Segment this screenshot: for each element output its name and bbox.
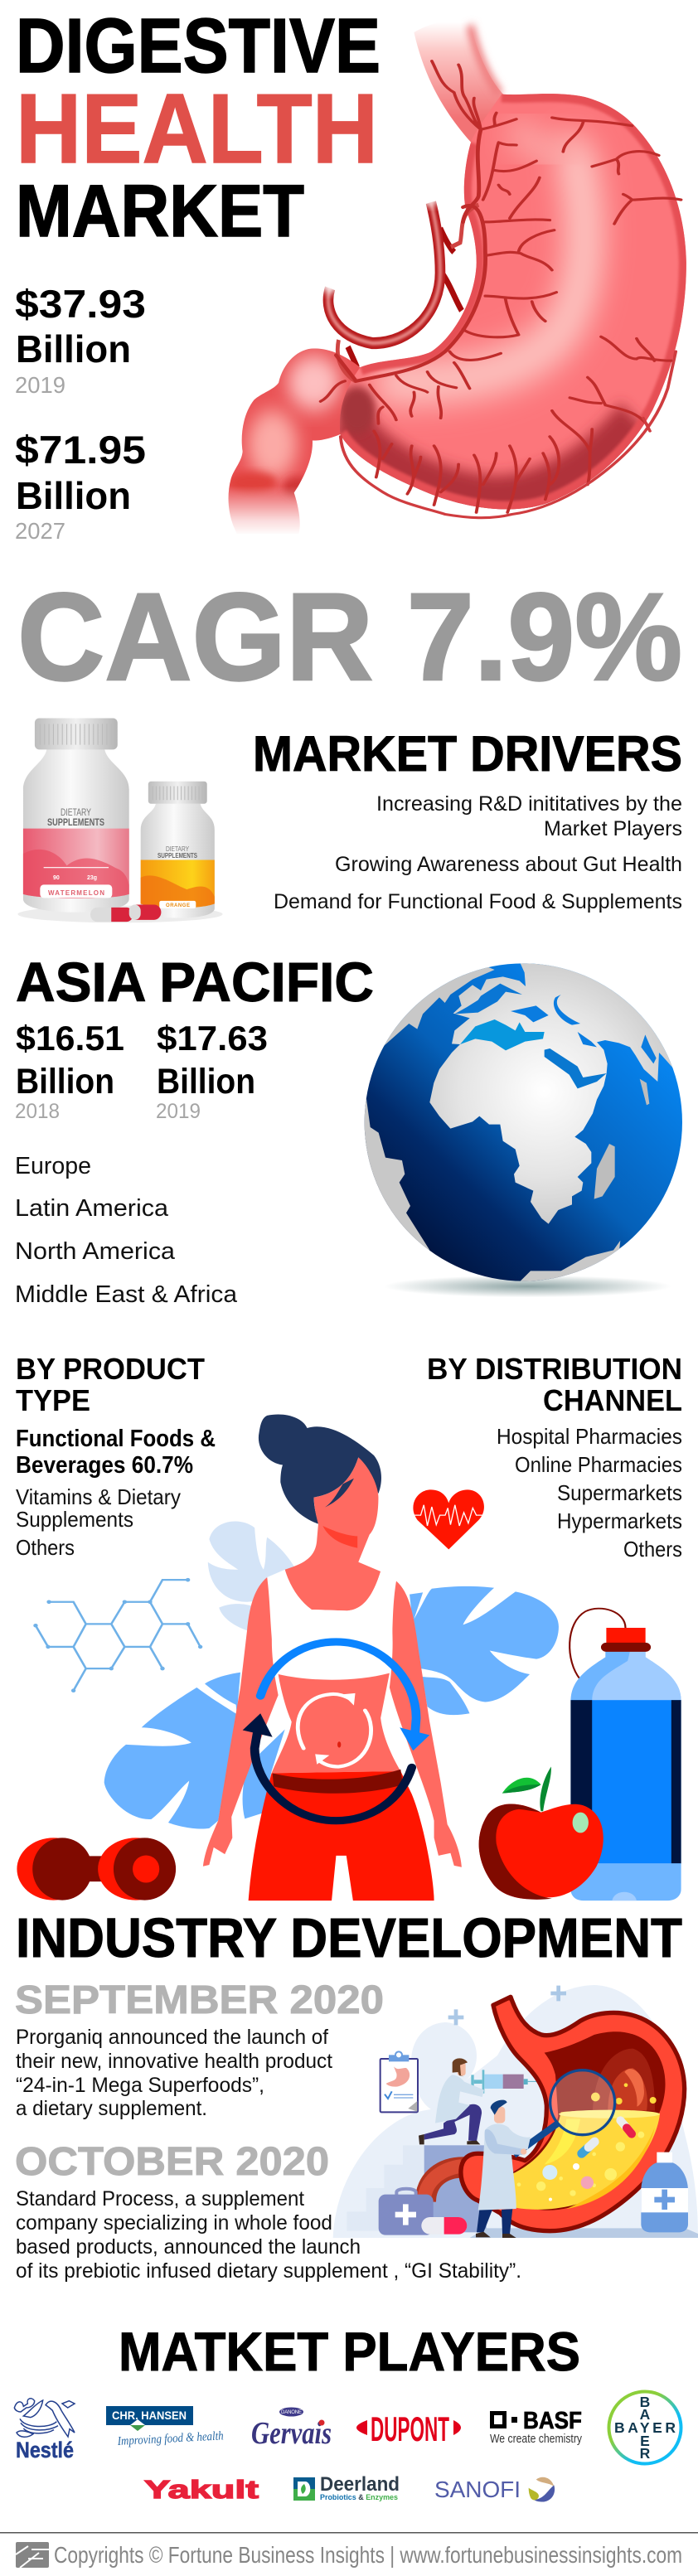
panel: by product type xyxy=(16,1352,216,1560)
logo: Gervais xyxy=(251,2407,332,2451)
other segments: Others xyxy=(16,1535,75,1560)
steps xyxy=(347,2145,424,2231)
channels list: Online Pharmacies xyxy=(515,1452,682,1477)
asia pacific 2018 value: Billion xyxy=(16,1062,114,1102)
icon: brand mark xyxy=(16,2542,49,2568)
logo: BASF: We create chemistry xyxy=(490,2432,582,2446)
asia pacific 2019 value: $17.63 xyxy=(157,1019,268,1058)
development: october 2020: based products, announced the launch xyxy=(16,2235,361,2259)
title: DIGESTIVE xyxy=(16,2,381,89)
logo: Deerland xyxy=(293,2473,400,2502)
icon: supplement bottles: 23g xyxy=(87,875,97,881)
other segments: Supplements xyxy=(16,1507,133,1532)
shorts xyxy=(249,1771,434,1901)
logo: DuPont: DUPONT xyxy=(371,2409,449,2448)
leading segment: Beverages 60.7% xyxy=(16,1452,193,1479)
icon: supplement bottles: ORANGE xyxy=(166,903,190,908)
development: september 2020: “24-in-1 Mega Superfoods”, xyxy=(16,2074,264,2097)
development: october 2020: OCTOBER 2020 xyxy=(15,2140,329,2184)
panel: by distribution channel xyxy=(427,1352,682,1562)
background shape xyxy=(333,1985,698,2238)
regions list: North America xyxy=(15,1238,176,1265)
stomach body xyxy=(332,84,692,516)
logo: Nestle xyxy=(14,2399,75,2462)
development: september 2020: their new, innovative health product xyxy=(16,2050,332,2073)
title: MARKET xyxy=(16,169,304,252)
logo: Bayer: R xyxy=(640,2445,651,2462)
blood vessels xyxy=(321,61,681,518)
seas xyxy=(454,984,522,1014)
market drivers list xyxy=(274,792,682,913)
development: october 2020 xyxy=(15,2140,521,2283)
belly cycle arrows xyxy=(298,1694,371,1767)
market size 2019 xyxy=(15,282,146,398)
other segments: Vitamins & Dietary xyxy=(16,1484,181,1509)
logo: Chr Hansen: Improving food & health xyxy=(117,2429,224,2448)
leading segment xyxy=(16,1426,216,1479)
icon: globe xyxy=(365,963,682,1296)
icon: apple xyxy=(479,1767,603,1900)
small bottle xyxy=(141,782,215,918)
midriff xyxy=(272,1673,400,1773)
channels list: Hypermarkets xyxy=(557,1508,682,1533)
logo: DuPont xyxy=(356,2409,461,2448)
icon: supplement bottles: WATERMELON xyxy=(48,889,104,897)
logo: Deerland: Probiotics & Enzymes xyxy=(320,2493,398,2502)
seated doctor xyxy=(419,2058,484,2144)
development: september 2020: a dietary supplement. xyxy=(16,2097,207,2120)
blue leaf left xyxy=(104,1673,240,1828)
regions list: Latin America xyxy=(15,1195,169,1222)
heading: market drivers: MARKET DRIVERS xyxy=(253,726,682,782)
asia pacific 2018 value: 2018 xyxy=(15,1100,60,1123)
development: september 2020 xyxy=(15,1978,384,2120)
title xyxy=(16,2,381,252)
duodenum xyxy=(229,348,360,532)
icon: supplement bottles: DIETARY xyxy=(166,845,190,853)
logo: BASF xyxy=(490,2408,582,2446)
icon: supplement bottles xyxy=(17,718,223,922)
icon: molecule xyxy=(33,1578,202,1692)
esophagus xyxy=(414,18,505,143)
land: Americas, Australia side, islands xyxy=(385,967,494,1046)
market size 2019: $37.93 xyxy=(15,282,146,326)
market drivers list: Demand for Functional Food & Supplements xyxy=(274,890,682,913)
light leaf xyxy=(208,1522,296,1630)
market size 2027: $71.95 xyxy=(15,428,146,472)
tank top xyxy=(267,1570,396,1680)
market size 2019: 2019 xyxy=(15,372,65,398)
market size 2027 xyxy=(15,428,146,544)
heading xyxy=(16,1352,205,1417)
asia pacific 2019 value xyxy=(156,1019,268,1123)
leading segment: Functional Foods & xyxy=(16,1426,216,1452)
logo: Bayer: A xyxy=(640,2406,651,2423)
asia pacific 2018 value xyxy=(15,1019,124,1123)
market drivers list: Market Players xyxy=(544,817,682,840)
intestine xyxy=(424,2166,467,2202)
footer xyxy=(0,2532,698,2568)
regions list: Europe xyxy=(15,1153,91,1179)
logo: Bayer: BAYER xyxy=(614,2419,676,2436)
channels list xyxy=(497,1424,682,1562)
title: HEALTH xyxy=(16,74,378,184)
heading: BY PRODUCT xyxy=(16,1352,205,1386)
magnifying glass xyxy=(514,2070,615,2155)
icon: supplement bottles: 90 xyxy=(53,875,60,881)
regions list: Middle East & Africa xyxy=(15,1281,238,1308)
icon: dumbbell xyxy=(17,1838,176,1901)
logo: Bayer xyxy=(608,2392,681,2463)
development: september 2020: Prorganiq announced the launch of xyxy=(16,2026,328,2049)
landmass: Eurasia and Africa xyxy=(429,963,673,1224)
other segments xyxy=(16,1484,181,1560)
market size 2019: Billion xyxy=(16,327,131,370)
market size 2027: Billion xyxy=(16,474,131,517)
logo: Sanofi: SANOFI xyxy=(434,2477,521,2502)
heading: CHANNEL xyxy=(543,1383,682,1417)
icon: heart xyxy=(413,1489,484,1549)
artery xyxy=(321,187,478,381)
logo: Deerland: Deerland xyxy=(320,2473,400,2496)
heading xyxy=(427,1352,682,1417)
logo: Gervais: DANONE xyxy=(281,2410,302,2415)
regions list xyxy=(15,1153,238,1308)
syringe xyxy=(471,2070,545,2094)
icon: supplement bottles: SUPPLEMENTS xyxy=(158,852,198,859)
logo: Bayer: E xyxy=(640,2433,650,2449)
channels list: Supermarkets xyxy=(557,1480,682,1505)
illustration: woman with gut health icons xyxy=(17,1414,681,1901)
logo: Yakult: Yakult xyxy=(144,2475,259,2504)
icon: water bottle xyxy=(570,1609,681,1901)
arms xyxy=(203,1577,462,1867)
clipboard xyxy=(381,2051,418,2112)
hair xyxy=(259,1414,381,1524)
heading: market players: MATKET PLAYERS xyxy=(119,2321,580,2382)
channels list: Others xyxy=(623,1537,682,1562)
logo: Chr Hansen xyxy=(106,2406,224,2448)
asia pacific 2019 value: 2019 xyxy=(156,1100,201,1123)
illustration: doctors examining stomach xyxy=(333,1985,698,2238)
pill xyxy=(421,2217,467,2235)
asia pacific 2019 value: Billion xyxy=(157,1062,255,1102)
blue leaf right xyxy=(410,1586,559,1715)
medical kit xyxy=(379,2189,434,2235)
development: october 2020: company specializing in whole food xyxy=(16,2211,332,2235)
logo: BASF: BASF xyxy=(523,2408,582,2434)
asia pacific 2018 value: $16.51 xyxy=(16,1019,124,1058)
logo: Nestle: Nestlé xyxy=(16,2438,74,2462)
development: october 2020: of its prebiotic infused dietary supplement , “GI Stability”. xyxy=(16,2259,521,2283)
heading: BY DISTRIBUTION xyxy=(427,1352,682,1386)
artery branches behind stomach xyxy=(348,228,462,367)
development: september 2020: SEPTEMBER 2020 xyxy=(15,1978,384,2022)
market drivers list: Growing Awareness about Gut Health xyxy=(335,853,682,876)
icon: supplement bottles: SUPPLEMENTS xyxy=(47,816,104,828)
market size 2027: 2027 xyxy=(15,518,65,544)
capsules xyxy=(90,908,133,922)
standing doctor xyxy=(476,2100,531,2238)
CAGR headline: CAGR 7.9% xyxy=(17,567,682,706)
circular arrows xyxy=(260,1642,416,1735)
medicine bottle xyxy=(641,2152,688,2232)
market drivers list: Increasing R&D inititatives by the xyxy=(376,792,682,816)
face and chest xyxy=(285,1457,381,1610)
large bottle xyxy=(23,718,129,913)
logo: Chr Hansen: CHR. HANSEN xyxy=(112,2409,187,2422)
development: october 2020: Standard Process, a supplement xyxy=(16,2187,304,2210)
channels list: Hospital Pharmacies xyxy=(497,1424,682,1449)
icon: supplement bottles: DIETARY xyxy=(61,806,91,818)
heading: asia pacific: ASIA PACIFIC xyxy=(16,951,374,1014)
illustration: stomach xyxy=(221,18,692,537)
logo: Gervais: Gervais xyxy=(251,2416,332,2451)
heading: TYPE xyxy=(16,1383,90,1417)
logo: Bayer: B xyxy=(640,2394,650,2410)
stomach xyxy=(461,1997,685,2231)
